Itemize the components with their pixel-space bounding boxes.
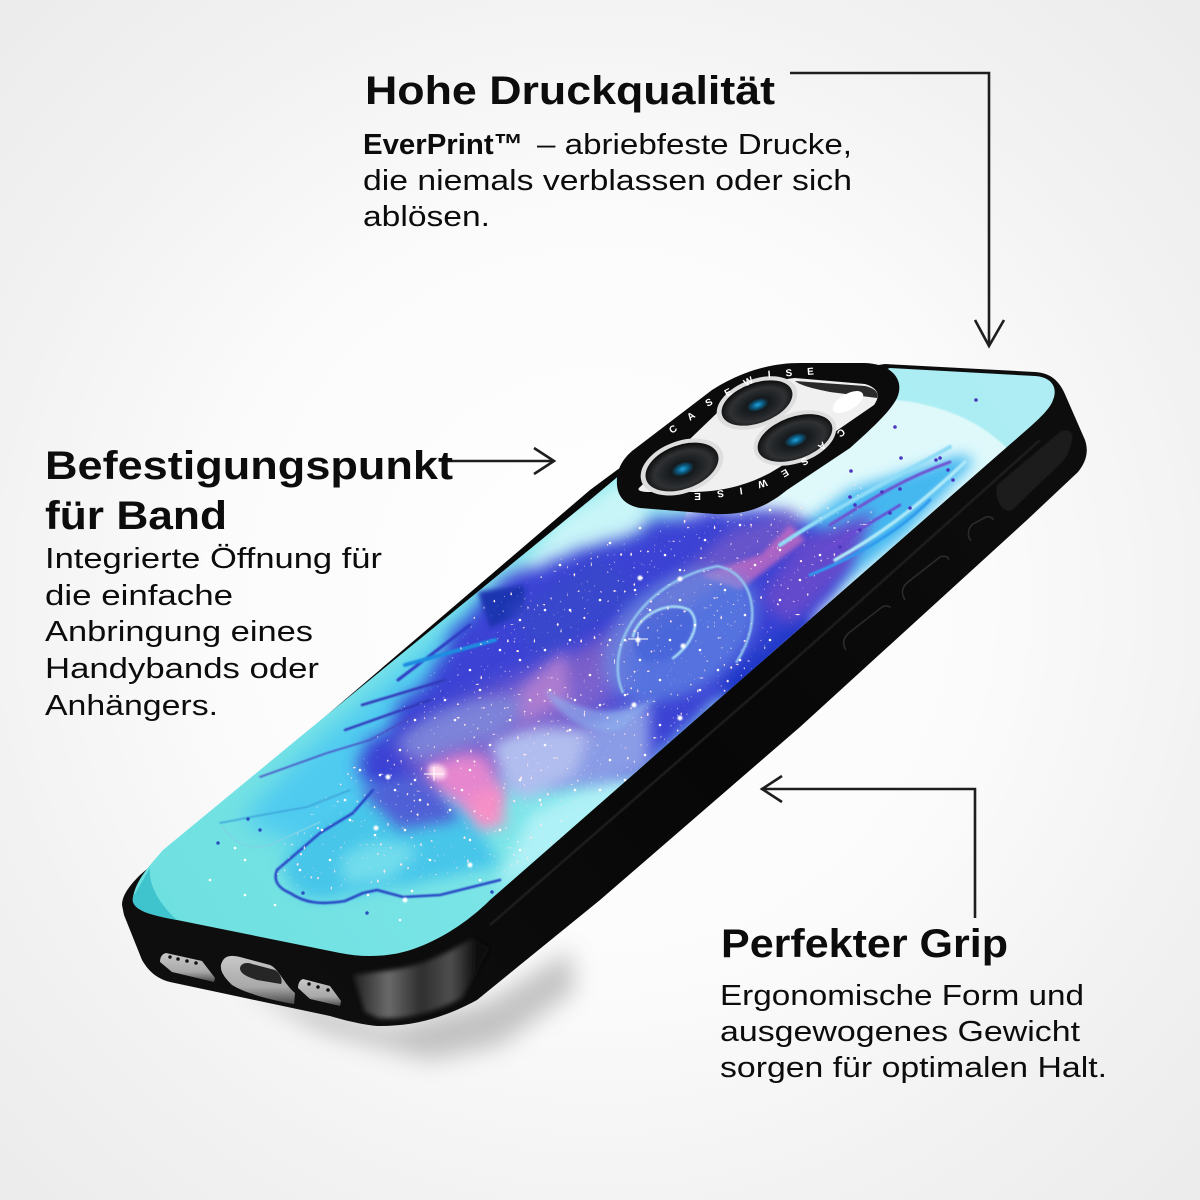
left splash spikes [260, 625, 495, 777]
case body [122, 364, 1087, 1026]
camera window [638, 378, 878, 492]
text block: strap attachment [45, 444, 453, 722]
purple core [400, 645, 630, 784]
text block: grip [720, 922, 1107, 1084]
blue droplets [218, 819, 492, 913]
upper-right blue wing [775, 455, 975, 610]
lavender lower fill [540, 700, 650, 790]
flash [829, 387, 867, 417]
heading: Befestigungspunkt [45, 444, 453, 488]
description: die einfache [45, 580, 233, 612]
description: Anbringung eines [45, 616, 313, 648]
side rail highlight [490, 440, 1040, 925]
camera bump [616, 363, 900, 514]
phone case [122, 363, 1087, 1026]
pale water lower right [494, 765, 644, 890]
arrow: grip [762, 776, 975, 918]
description: Handybands oder [45, 653, 319, 685]
glossy corner highlight [353, 938, 490, 1018]
star field [270, 480, 880, 895]
lens lower left [633, 428, 731, 506]
description: ablösen. [363, 201, 490, 233]
description: sorgen für optimalen Halt. [720, 1052, 1107, 1084]
heading: Perfekter Grip [721, 922, 1008, 966]
description: – abriebfeste Drucke, [537, 129, 852, 161]
blue specks [840, 400, 976, 547]
description: die niemals verblassen oder sich [363, 165, 852, 197]
upper-right purple streaks [760, 510, 875, 625]
description [45, 543, 382, 722]
heading [45, 444, 453, 538]
description: Anhängers. [45, 690, 218, 722]
lens right [746, 400, 844, 476]
bottom ports [160, 953, 341, 1006]
bump ring [617, 363, 899, 514]
description: ausgewogenes Gewicht [720, 1016, 1080, 1048]
drop shadow under phone [240, 950, 575, 1060]
description [720, 980, 1107, 1084]
pink clouds [425, 754, 505, 815]
wing interior [279, 812, 502, 902]
cyan outer nebula [240, 594, 480, 848]
lens upper [709, 366, 805, 440]
brand text upper: CASEWISE [670, 368, 814, 433]
description: Ergonomische Form und [720, 980, 1084, 1012]
heading: für Band [45, 494, 227, 538]
heading: Hohe Druckqualität [365, 69, 775, 113]
charging port [221, 956, 295, 1004]
bubble nebula [598, 562, 763, 708]
lower wing outline [220, 790, 500, 903]
description: EverPrint™ [363, 129, 523, 161]
top-right side gloss patch [996, 430, 1072, 511]
side buttons [844, 517, 993, 650]
window inner shade [795, 381, 877, 398]
stars [210, 510, 820, 920]
description [363, 129, 852, 233]
darker teal edge lower-left [130, 868, 178, 921]
description: Integrierte Öffnung für [45, 543, 382, 575]
back print artwork [120, 360, 1070, 970]
pale halo upper right [684, 400, 1007, 657]
text block: print quality [363, 69, 852, 233]
upper-right streaks [780, 447, 965, 575]
left speaker grille [160, 953, 215, 982]
arrow: print quality [790, 73, 1004, 346]
deep blue nebula [355, 509, 845, 793]
brand text lower: CASEWISE [694, 429, 844, 500]
pale nebula veil [490, 727, 590, 800]
right speaker grille [298, 979, 341, 1006]
arrow: strap attachment [445, 448, 554, 474]
